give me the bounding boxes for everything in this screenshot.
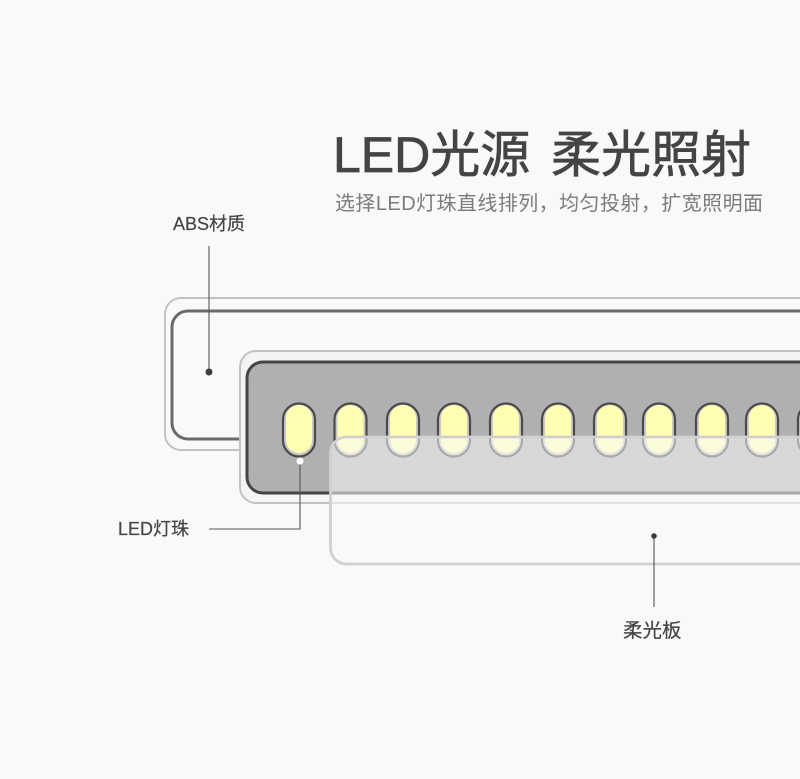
LED beads row bbox=[283, 404, 800, 456]
ABS leader line bbox=[208, 246, 210, 372]
diffuser label: 柔光板 bbox=[623, 620, 682, 642]
LED bead label: LED灯珠 bbox=[118, 519, 189, 539]
LED bead 1 bbox=[283, 404, 315, 456]
LED bead 2 bbox=[334, 404, 366, 456]
subtitle: 选择LED灯珠直线排列，均匀投射，扩宽照明面 bbox=[335, 192, 763, 215]
callout: ABS material bbox=[173, 214, 245, 376]
LED bead 4 bbox=[438, 404, 470, 456]
diffuser panel bbox=[330, 437, 800, 564]
title: LED光源 bbox=[333, 127, 530, 183]
LED bead 6 bbox=[542, 404, 574, 456]
title: 柔光照射 bbox=[551, 127, 751, 183]
ABS leader dot bbox=[206, 368, 212, 376]
LED bead 9 bbox=[696, 404, 728, 456]
ABS housing outer outline bbox=[165, 298, 800, 450]
diffuser leader line bbox=[653, 536, 655, 607]
diffuser leader dot bbox=[651, 533, 657, 539]
LED bead 3 bbox=[387, 404, 419, 456]
LED bead 10 bbox=[746, 404, 778, 456]
callout: diffuser bbox=[623, 533, 682, 642]
LED bead 11 bbox=[798, 404, 800, 456]
LED board outer outline bbox=[240, 351, 800, 503]
LED bead leader line bbox=[209, 462, 300, 529]
LED bead 5 bbox=[490, 404, 522, 456]
LED board bbox=[247, 362, 800, 493]
LED bead 7 bbox=[594, 404, 626, 456]
LED bead leader dot bbox=[296, 458, 304, 464]
callout: LED bead bbox=[118, 458, 304, 539]
ABS label: ABS材质 bbox=[173, 214, 245, 234]
LED bead 8 bbox=[643, 404, 675, 456]
ABS housing inner outline bbox=[172, 311, 800, 439]
